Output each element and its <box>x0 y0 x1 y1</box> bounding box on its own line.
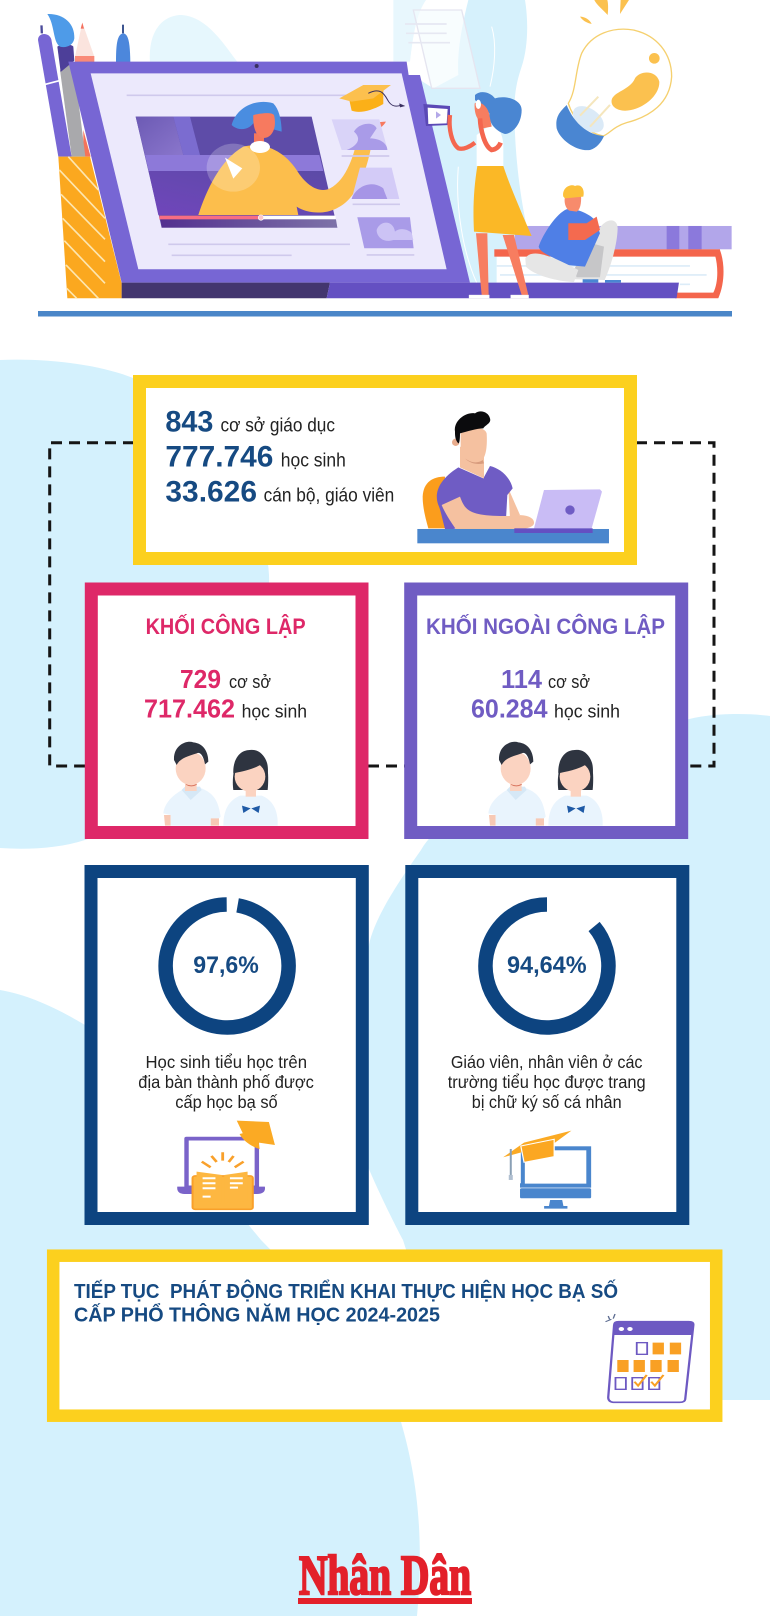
stat: public students count <box>144 694 307 724</box>
woman with tablet <box>423 92 532 298</box>
icon: calendar <box>606 1314 693 1402</box>
description: trường tiểu học được trang <box>448 1072 646 1092</box>
donut chart: 94,64% <box>485 904 608 1028</box>
stat: students <box>165 441 346 474</box>
background blob: lower left <box>0 990 420 1616</box>
boy reading <box>525 185 621 283</box>
stat: public schools count: 729 <box>180 664 221 694</box>
logo: Nhân Dân: Nhân Dân <box>299 1545 471 1607</box>
icon: laptop with book and cap <box>177 1121 275 1209</box>
icon: students <box>488 742 603 826</box>
stat: private students count <box>471 694 620 724</box>
graduation cap <box>349 90 383 112</box>
description <box>138 1052 314 1112</box>
stat: private schools count: 114 <box>501 664 543 694</box>
description <box>448 1052 646 1112</box>
books stack <box>494 226 732 298</box>
stat: private schools count: cơ sở <box>548 672 590 692</box>
donut chart: 94,64%: 94,64% <box>507 952 587 979</box>
stat: schools: cơ sở giáo dục <box>220 416 335 437</box>
description: bị chữ ký số cá nhân <box>472 1092 622 1112</box>
heading <box>74 1279 618 1327</box>
stat: public students count: 717.462 <box>144 694 235 724</box>
progress bar <box>159 216 261 219</box>
icon: monitor with cap <box>503 1131 591 1209</box>
stat: public students count: học sinh <box>242 702 307 722</box>
panel: totals <box>140 382 630 558</box>
video frame <box>136 117 337 228</box>
background blob: right <box>359 714 770 1400</box>
stat: students: 777.746 <box>165 441 273 474</box>
stat: teachers: 33.626 <box>165 476 257 509</box>
background blob: upper left <box>0 360 269 849</box>
icon: students <box>163 742 278 826</box>
pale and blue shapes behind woman <box>393 0 528 283</box>
stat: schools: 843 <box>165 406 213 439</box>
stat: teachers <box>165 476 394 509</box>
stat: public schools count <box>180 664 271 694</box>
description: Giáo viên, nhân viên ở các <box>451 1052 643 1072</box>
heading: TIẾP TỤC PHÁT ĐỘNG TRIỂN KHAI THỰC HIỆN HỌC BẠ SỐ <box>74 1279 618 1303</box>
donut chart: 97,6% <box>166 904 289 1027</box>
laptop with video lesson <box>68 62 679 298</box>
light bulb <box>556 0 672 150</box>
description: Học sinh tiểu học trên <box>146 1052 307 1072</box>
panel: call to action <box>53 1256 716 1416</box>
stat: public schools count: cơ sở <box>229 672 271 692</box>
stat: students: học sinh <box>281 451 346 472</box>
laptop shell <box>68 62 470 283</box>
heading: CẤP PHỔ THÔNG NĂM HỌC 2024-2025 <box>74 1303 440 1327</box>
panel: public schools <box>91 589 362 832</box>
pens and pencil cup <box>38 14 130 298</box>
stat: schools <box>165 406 335 439</box>
description: địa bàn thành phố được <box>138 1072 314 1092</box>
donut chart: 97,6%: 97,6% <box>193 952 259 979</box>
faint blue blob behind laptop <box>150 15 237 62</box>
description: cấp học bạ số <box>175 1092 278 1112</box>
hero baseline bar <box>38 311 732 316</box>
teacher <box>232 102 282 132</box>
dashed connector <box>50 443 714 766</box>
stat: private students count: học sinh <box>554 702 620 722</box>
stat: private schools count <box>501 664 590 694</box>
stat: teachers: cán bộ, giáo viên <box>264 486 394 507</box>
heading: KHỐI CÔNG LẬP <box>146 613 306 639</box>
laptop screen <box>91 73 447 269</box>
thumbnails <box>332 119 388 150</box>
stat: private students count: 60.284 <box>471 694 548 724</box>
heading: KHỐI NGOÀI CÔNG LẬP <box>426 613 665 639</box>
icon: man at laptop <box>417 411 609 543</box>
panel: teachers digital signature <box>412 872 683 1218</box>
panel: private schools <box>411 589 682 832</box>
hero illustration: online classroom <box>38 0 732 298</box>
panel: students digital records <box>91 872 362 1218</box>
